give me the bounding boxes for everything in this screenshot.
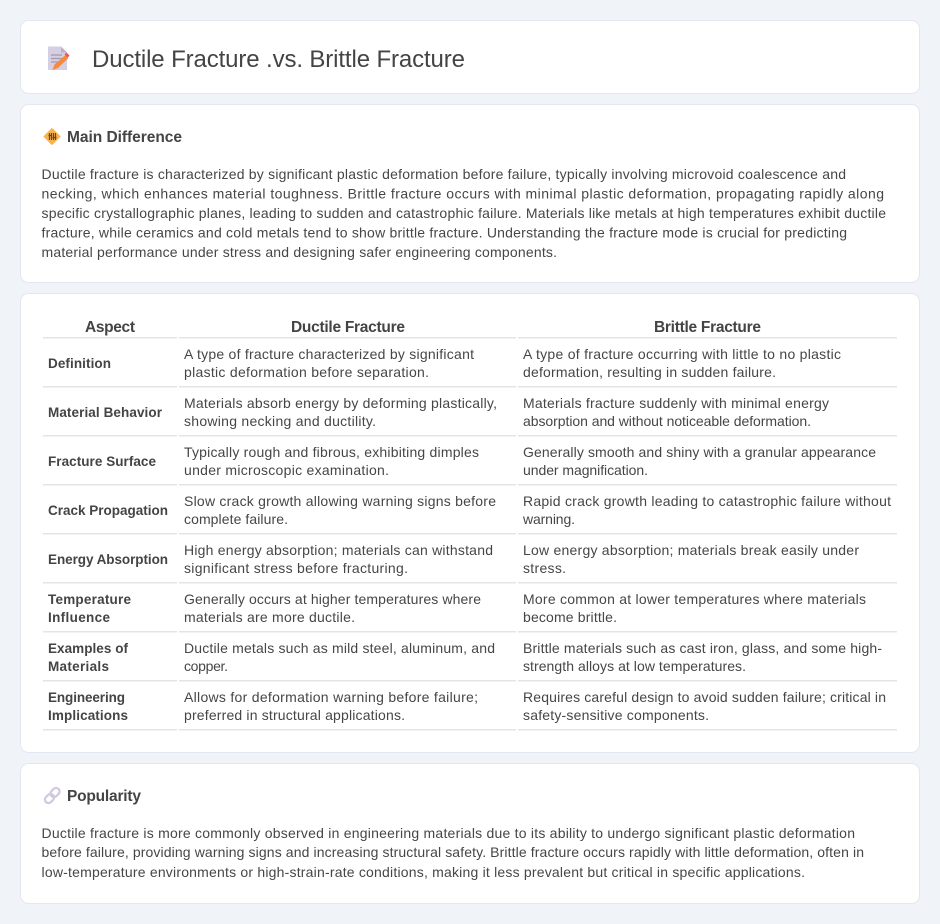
row: energy absorption — [48, 542, 859, 576]
text block: main difference: fracture, while ceramics and cold metals tend to show brittle fracture. Understanding the fracture mode is crucial for predicting — [42, 224, 847, 240]
row: material behavior: absorption and without noticeable deformation. — [523, 413, 811, 429]
text block: main difference: material performance under stress and designing safer engineering components. — [42, 244, 557, 260]
text block: main difference: necking, which enhances material toughness. Brittle fracture occurs with minimal plastic deformation, propagating rapidly along — [42, 186, 884, 202]
row: crack propagation — [48, 493, 891, 527]
row: material behavior — [48, 395, 829, 429]
row: temperature influence: Influence — [48, 610, 110, 625]
table header: Aspect — [85, 319, 135, 336]
row: fracture surface: Fracture Surface — [48, 454, 156, 469]
row: definition: plastic deformation before separation. — [184, 364, 429, 380]
row: examples of materials: strength alloys at low temperatures. — [523, 658, 746, 674]
text block: main difference — [42, 166, 886, 260]
panel: main difference — [20, 104, 920, 282]
row: definition: A type of fracture occurring with little to no plastic — [523, 346, 841, 362]
row: material behavior: showing necking and ductility. — [184, 413, 376, 429]
row: examples of materials: Ductile metals such as mild steel, aluminum, and — [184, 640, 495, 656]
row: engineering implications: safety-sensitive components. — [523, 707, 709, 723]
row: definition: Definition — [48, 356, 111, 371]
row: crack propagation: complete failure. — [184, 511, 288, 527]
row: fracture surface: under magnification. — [523, 462, 648, 478]
row: crack propagation: warning. — [522, 511, 575, 527]
row: engineering implications: Implications — [48, 708, 128, 723]
panel: popularity — [20, 764, 920, 904]
row: temperature influence: materials are more ductile. — [184, 609, 355, 625]
row: temperature influence: More common at lower temperatures where materials — [523, 591, 866, 607]
row: engineering implications: Engineering — [48, 690, 125, 705]
row: fracture surface — [48, 444, 876, 478]
row: examples of materials: Brittle materials such as cast iron, glass, and some high- — [523, 640, 882, 656]
row: engineering implications: Requires careful design to avoid sudden failure; critical in — [523, 689, 886, 705]
row: energy absorption: Energy Absorption — [48, 552, 168, 567]
row: engineering implications: preferred in structural applications. — [184, 707, 405, 723]
text block: popularity: Ductile fracture is more commonly observed in engineering materials due to its ability to undergo significant plastic deformation — [42, 825, 855, 841]
row: temperature influence: Generally occurs at higher temperatures where — [184, 591, 481, 607]
text block: popularity: before failure, providing warning signs and increasing structural safety. Brittle fracture occurs rapidly with little deformation, often in — [42, 844, 864, 860]
row: temperature influence: Temperature — [48, 592, 131, 607]
row: temperature influence: become brittle. — [523, 609, 617, 625]
row: engineering implications: Allows for deformation warning before failure; — [184, 689, 478, 705]
row: temperature influence — [48, 591, 866, 625]
row: material behavior: Material Behavior — [48, 405, 163, 420]
row: fracture surface: Typically rough and fibrous, exhibiting dimples — [184, 444, 479, 460]
row: examples of materials — [48, 640, 882, 674]
row: fracture surface: Generally smooth and shiny with a granular appearance — [523, 444, 876, 460]
row: definition: A type of fracture characterized by significant — [184, 346, 474, 362]
icon: chain link — [43, 786, 61, 805]
title: Ductile Fracture .vs. Brittle Fracture — [92, 46, 465, 73]
row: engineering implications — [48, 689, 886, 723]
panel: header — [20, 20, 920, 94]
row: definition — [48, 346, 841, 380]
text block: popularity — [42, 825, 864, 880]
row: examples of materials: Examples of — [48, 641, 128, 656]
heading: main difference: Main Difference — [67, 129, 182, 146]
row: examples of materials: copper. — [184, 658, 228, 674]
panel: comparison table — [20, 294, 920, 752]
row: material behavior: Materials fracture suddenly with minimal energy — [523, 395, 829, 411]
heading: popularity: Popularity — [67, 788, 141, 805]
row: energy absorption: High energy absorption; materials can withstand — [184, 542, 493, 558]
row: crack propagation: Rapid crack growth leading to catastrophic failure without — [523, 493, 891, 509]
table header — [85, 319, 761, 336]
icon: document with pencil — [48, 46, 70, 70]
text block: main difference: specific crystallographic planes, leading to sudden and catastrophic failure. Materials like metals at high temperatures exhibit ductile — [42, 205, 886, 221]
row: energy absorption: stress. — [523, 560, 566, 576]
row: definition: deformation, resulting in sudden failure. — [523, 364, 776, 380]
table header: Brittle Fracture — [654, 319, 761, 336]
row: energy absorption: significant stress before fracturing. — [184, 560, 408, 576]
row: crack propagation: Slow crack growth allowing warning signs before — [184, 493, 496, 509]
table header: Ductile Fracture — [291, 319, 405, 336]
row: examples of materials: Materials — [48, 659, 109, 674]
row: energy absorption: Low energy absorption; materials break easily under — [523, 542, 859, 558]
text block: main difference: Ductile fracture is characterized by significant plastic deformation before failure, typically involving microvoid coalescence and — [42, 166, 846, 182]
icon: warning diamond — [44, 128, 60, 144]
row: crack propagation: Crack Propagation — [48, 503, 168, 518]
row: material behavior: Materials absorb energy by deforming plastically, — [184, 395, 497, 411]
row: fracture surface: under microscopic examination. — [184, 462, 389, 478]
text block: popularity: low-temperature environments or high-strain-rate conditions, making it less prevalent but critical in specific applications. — [42, 864, 805, 880]
